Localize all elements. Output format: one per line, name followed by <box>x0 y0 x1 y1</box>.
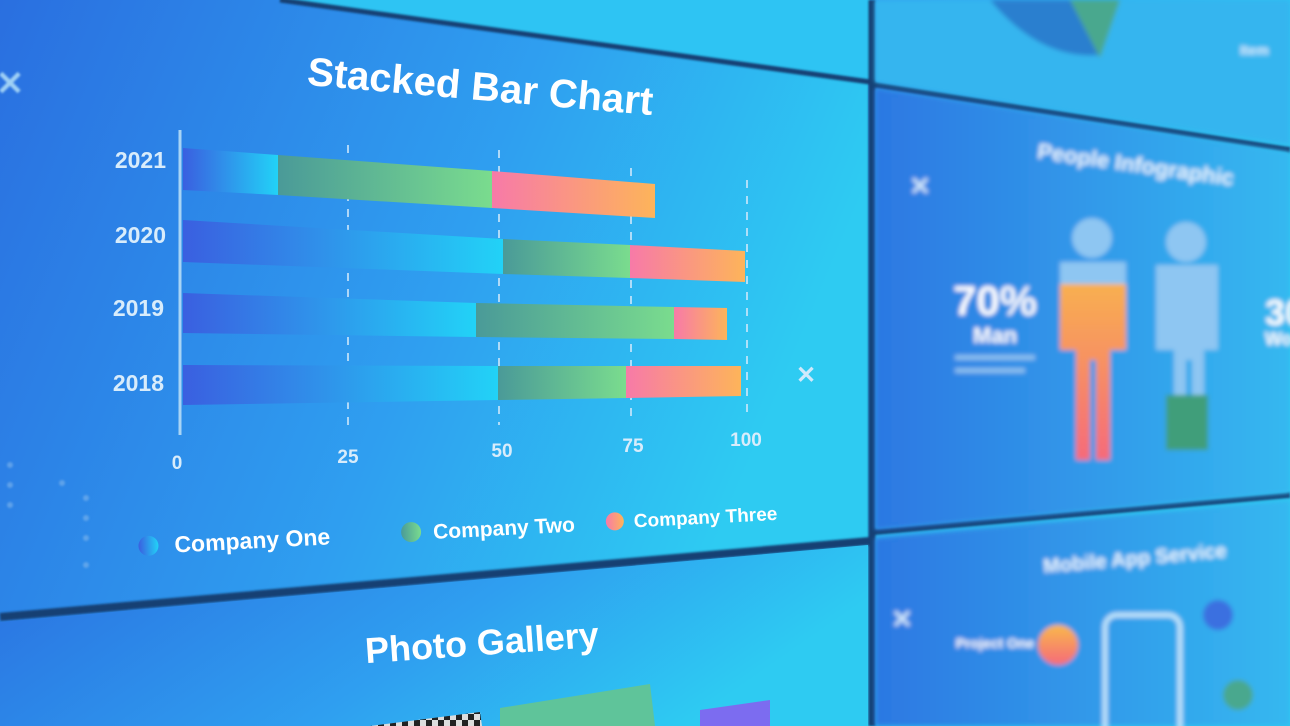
icon: x mark right: ✕ <box>796 362 816 389</box>
tick labels: 75 <box>622 436 644 457</box>
panel: main chart screen <box>0 0 868 615</box>
panel: right top <box>875 0 1290 145</box>
panel: mobile app service: Mobile App Service <box>1042 540 1227 578</box>
legend: company three: Company Three <box>633 504 778 532</box>
legend: company one: Company One <box>174 523 331 557</box>
year labels: 2020 <box>115 222 166 248</box>
tick labels: 0 <box>172 453 182 474</box>
legend <box>138 500 778 559</box>
panel: people infographic: 70% <box>953 277 1037 324</box>
bar 2019 <box>183 293 727 340</box>
panel: people infographic: ✕ <box>909 171 931 201</box>
tick labels <box>172 430 762 474</box>
panel: right top: Item <box>1240 42 1269 58</box>
legend: company two: Company Two <box>433 513 576 544</box>
axis <box>178 130 182 435</box>
panel: mobile app service: ✕ <box>891 604 913 634</box>
tick labels: 50 <box>491 441 513 462</box>
tick labels: 25 <box>337 447 359 468</box>
bar 2021 <box>183 148 655 218</box>
year labels: 2018 <box>113 370 164 396</box>
bar 2020 <box>183 220 745 282</box>
gridlines <box>348 145 747 428</box>
panel: photo gallery: Photo Gallery <box>364 614 600 671</box>
title: Stacked Bar Chart <box>306 50 655 124</box>
year labels <box>113 147 166 396</box>
panel: people infographic <box>875 88 1290 530</box>
tick labels: 100 <box>730 430 762 451</box>
panel: photo gallery <box>0 545 868 726</box>
panel: mobile app service <box>875 500 1290 726</box>
panel: people infographic: People Infographic <box>1036 138 1236 191</box>
panel: people infographic: Man <box>973 323 1017 348</box>
panel: mobile app service: Project One <box>956 635 1034 651</box>
year labels: 2021 <box>115 147 166 173</box>
bar 2018 <box>183 365 741 405</box>
bar chart <box>183 148 745 405</box>
decorative dots <box>7 462 89 568</box>
year labels: 2019 <box>113 295 164 321</box>
panel: top strip <box>280 0 870 80</box>
